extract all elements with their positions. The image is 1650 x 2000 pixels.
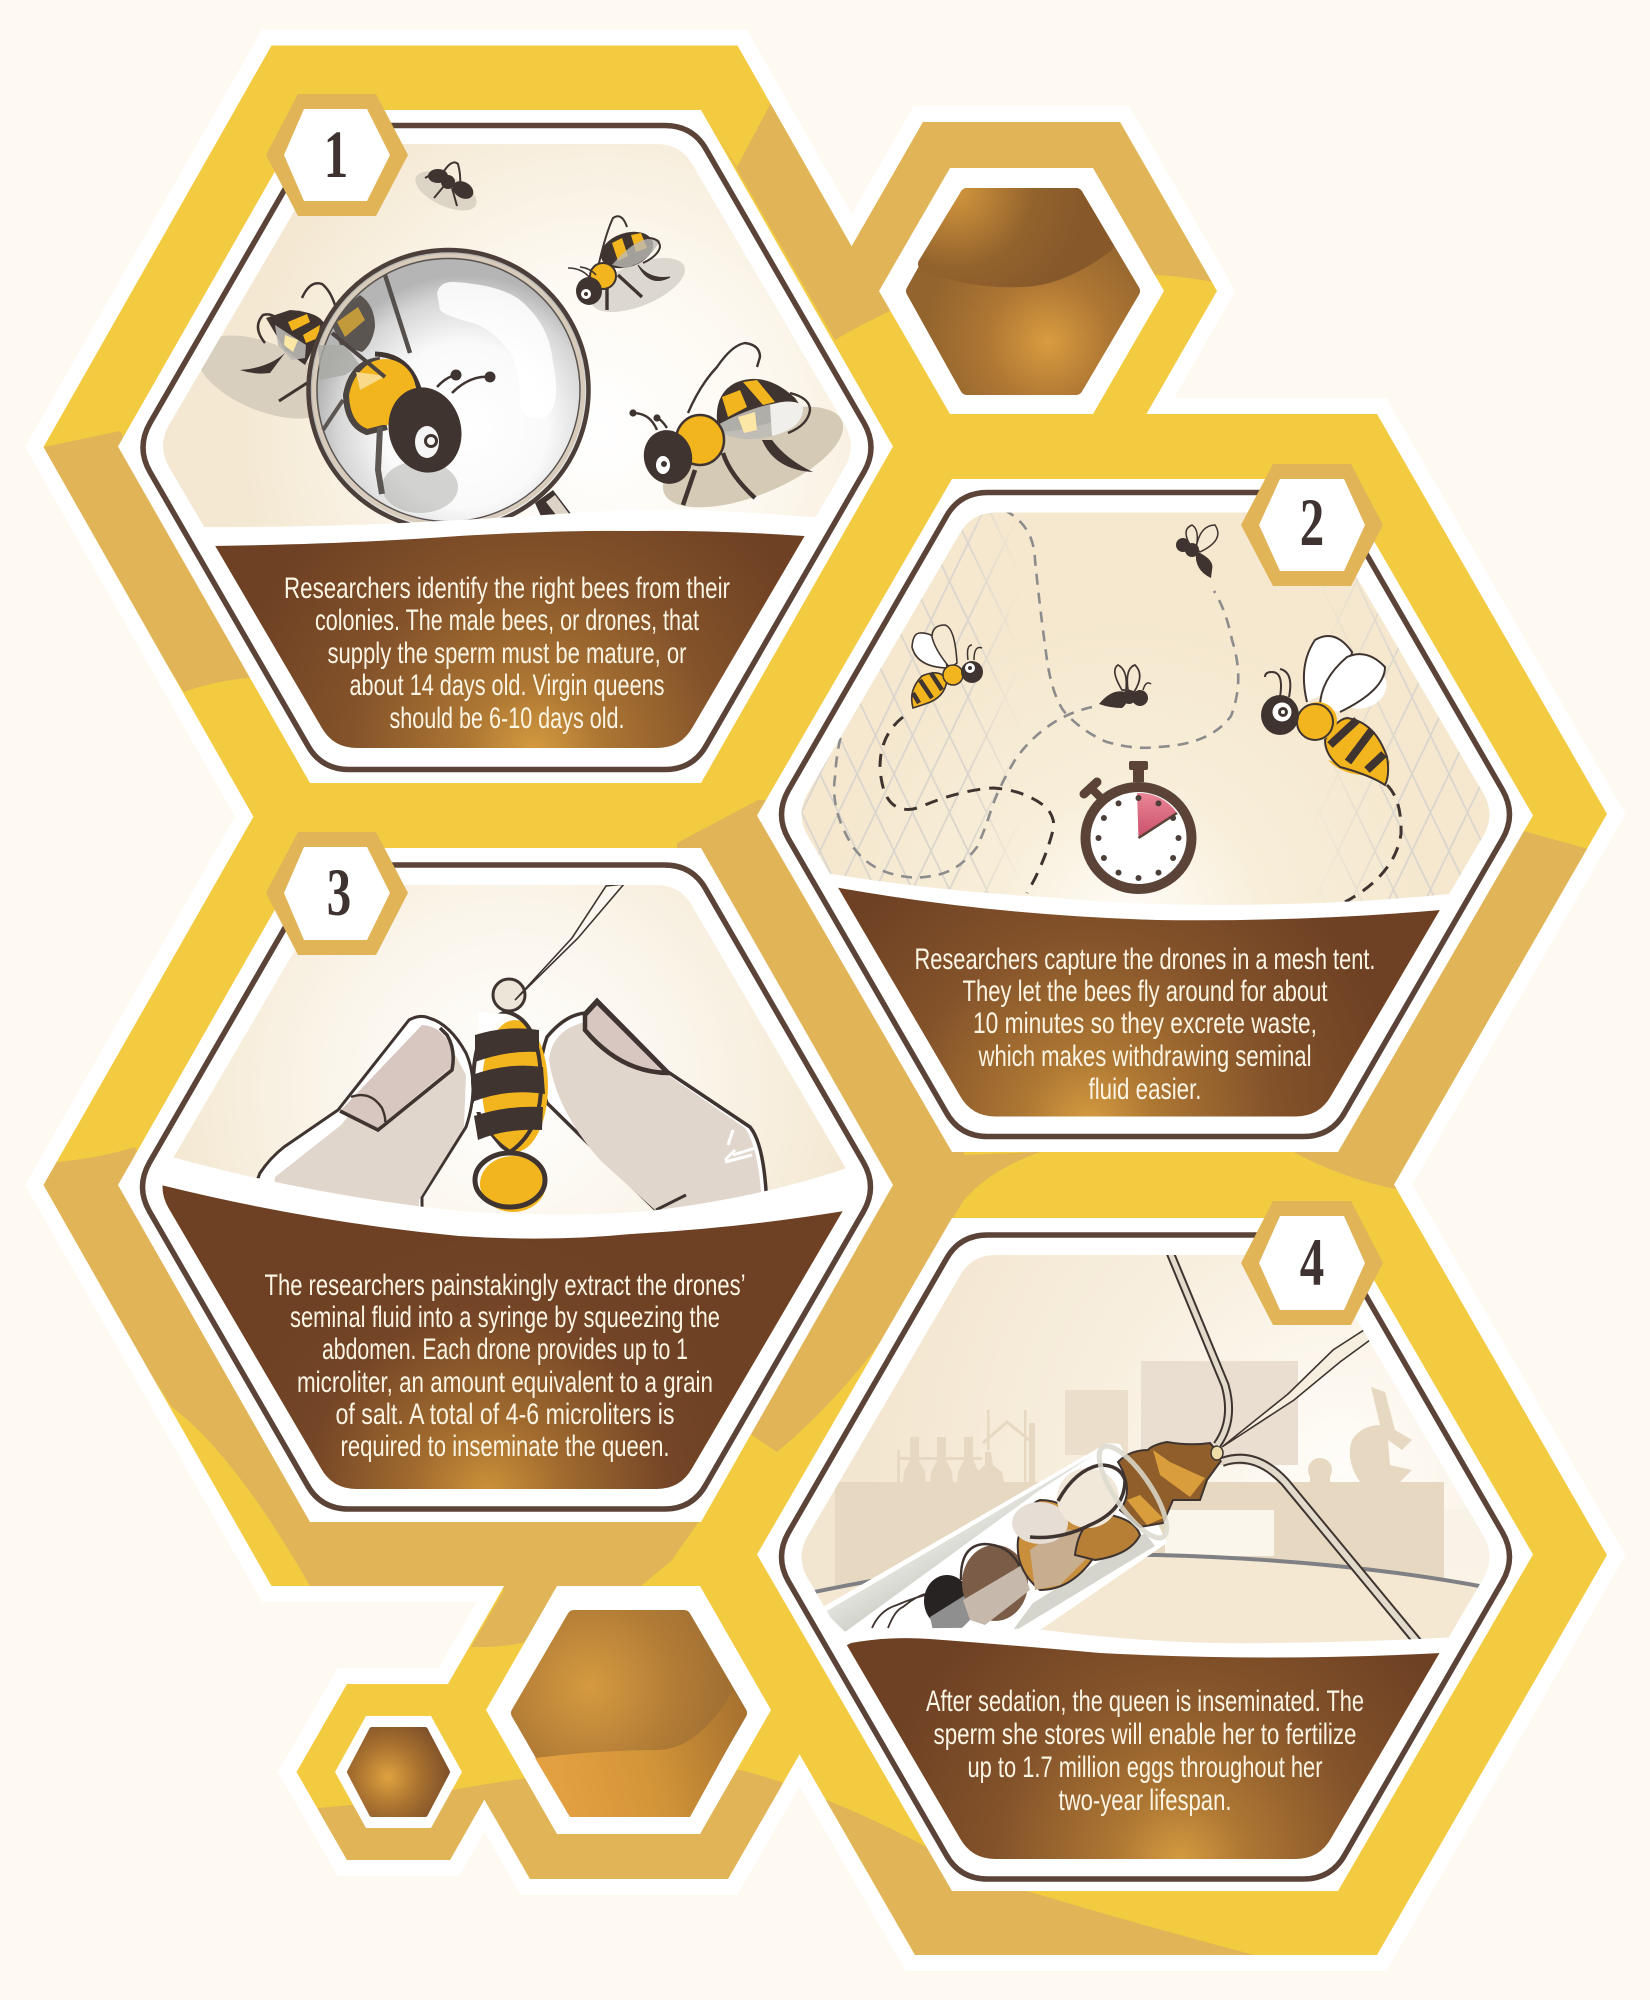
icon: lower hook core: [1222, 1459, 1420, 1645]
badge: number 3: [266, 832, 408, 955]
icon: big bee right: [1261, 636, 1392, 785]
brown caption panel: [838, 888, 1440, 1116]
text: step 1: colonies. The male bees, or drones, that: [315, 604, 699, 637]
text: step 3: seminal fluid into a syringe by squeezing the: [290, 1301, 720, 1334]
white wave: [780, 1628, 1510, 1700]
text: step 2: Researchers capture the drones in a mesh tent.: [914, 943, 1376, 976]
badge: number 4: [1241, 1201, 1383, 1325]
icon: dark bee top: [1176, 525, 1218, 578]
badge: number 2: [1241, 464, 1383, 586]
text: step 2: fluid easier.: [1088, 1073, 1202, 1106]
icon: upper hook core: [1169, 1250, 1229, 1445]
icon: small striped bee left: [912, 625, 983, 708]
brown caption panel: [162, 1185, 843, 1489]
icon: bee body: [472, 979, 548, 1212]
icon: needle: [515, 884, 624, 1000]
outline of step 1 panel: [143, 126, 871, 770]
icon: tube lower band: [1010, 1533, 1155, 1634]
panel 2 illustration: [802, 512, 1490, 1116]
panel: step 1 identify bees: [143, 126, 871, 780]
text: step 4: After sedation, the queen is inseminated. The: [926, 1685, 1364, 1718]
panel: step 2 mesh tent: [780, 492, 1510, 1140]
icon: dark bee middle: [1099, 665, 1151, 708]
text: step 4: up to 1.7 million eggs throughout her: [968, 1751, 1322, 1784]
lab silhouette background: [835, 1361, 1444, 1586]
icon: magnifying glass: [308, 250, 588, 530]
mesh tent pattern: [802, 513, 1482, 902]
badge: number 3: 3: [327, 854, 351, 930]
table with grey edge: [800, 1555, 1500, 1680]
panel 1 illustration: [163, 144, 851, 748]
outline of step 4 panel: [782, 1235, 1510, 1879]
icon: right finger: [541, 1000, 767, 1210]
decorative hexagon: bottom large: [486, 1586, 771, 1834]
icon: tube upper band: [825, 1454, 1095, 1632]
inner white hexagons: [118, 110, 1533, 1891]
badge: number 1: [266, 94, 408, 216]
badge: number 4: 4: [1300, 1224, 1324, 1300]
text: step 4: [926, 1685, 1364, 1817]
icon: large bee on right: [629, 342, 844, 508]
decorative hexagon: bottom small: [335, 1716, 462, 1828]
text: step 3: microliter, an amount equivalent to a grain: [297, 1366, 713, 1399]
icon: left bee behind lens: [201, 282, 336, 418]
outline of step 2 panel: [782, 492, 1510, 1136]
panel: step 3 extract fluid: [142, 865, 870, 1510]
outline of step 3 panel: [142, 865, 870, 1509]
icon: lower hook: [1222, 1459, 1420, 1645]
text: step 1: supply the sperm must be mature, or: [328, 637, 687, 670]
icon: upper hook: [1169, 1250, 1229, 1445]
text: step 3: abdomen. Each drone provides up to 1: [322, 1333, 688, 1366]
icon: queen bee body: [872, 1442, 1223, 1640]
brown caption panel: [780, 1638, 1510, 1880]
flight path: dark dashes: [880, 717, 1401, 902]
white wave: [162, 1158, 850, 1238]
icon: stopwatch: [1084, 761, 1192, 889]
text: step 3: The researchers painstakingly extract the drones’: [264, 1269, 746, 1302]
text: step 3: [264, 1269, 746, 1463]
white wave: [204, 510, 816, 546]
badge: number 1: 1: [324, 116, 348, 192]
icon: syringe needle: [1222, 1330, 1370, 1447]
badge: number 2: 2: [1300, 484, 1324, 560]
decorative hexagon: top right: [879, 168, 1164, 414]
panel 4 illustration: [802, 1255, 1490, 1859]
icon: middle bee: [568, 215, 685, 312]
text: step 4: sperm she stores will enable her to fertilize: [934, 1718, 1356, 1751]
text: step 2: They let the bees fly around for about: [962, 975, 1328, 1008]
text: step 4: two-year lifespan.: [1058, 1784, 1232, 1817]
white wave: [830, 874, 1449, 924]
text: step 2: [914, 943, 1376, 1106]
text: step 2: which makes withdrawing seminal: [978, 1040, 1312, 1073]
icon: small dark bee: [416, 161, 476, 210]
icon: tube collar: [1088, 1437, 1178, 1547]
text: step 3: of salt. A total of 4-6 microliters is: [336, 1398, 674, 1431]
panel: step 4 insemination: [780, 1235, 1510, 1880]
panel 3 illustration: [150, 870, 870, 1510]
text: step 1: should be 6-10 days old.: [390, 702, 624, 735]
text: step 1: Researchers identify the right bees from their: [284, 572, 730, 605]
icon: glass tube: [823, 1443, 1167, 1650]
text: step 1: [284, 572, 730, 735]
text: step 2: 10 minutes so they excrete waste,: [973, 1007, 1317, 1040]
flight path: grey dashes: [834, 510, 1238, 878]
text: step 1: about 14 days old. Virgin queens: [350, 669, 664, 702]
icon: left finger: [256, 1014, 474, 1207]
text: step 3: required to inseminate the queen.: [340, 1430, 670, 1463]
brown caption panel: [215, 530, 804, 748]
